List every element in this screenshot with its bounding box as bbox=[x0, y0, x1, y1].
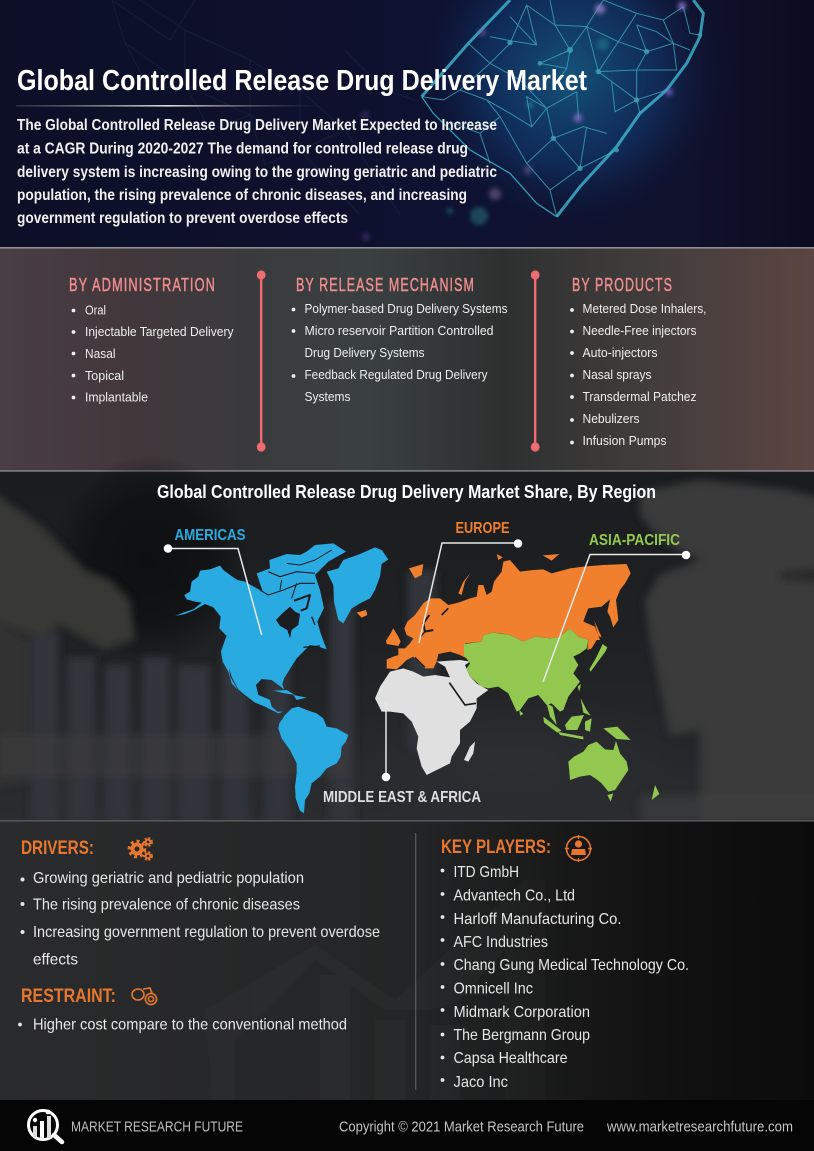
map region: Europe and Russia bbox=[357, 554, 631, 669]
icon: gears bbox=[129, 838, 152, 860]
chart heading: Global Controlled Release Drug Delivery Market Share, By Region bbox=[157, 482, 656, 502]
intro paragraph: The Global Controlled Release Drug Delivery Market Expected to Increase bbox=[17, 117, 497, 134]
column: by products: Transdermal Patchez bbox=[582, 389, 696, 404]
intro paragraph: government regulation to prevent overdose effects bbox=[17, 210, 348, 227]
background illustration: bright capsule mesh bbox=[422, 0, 703, 217]
column: by products bbox=[570, 274, 706, 448]
panel: header bbox=[0, 0, 814, 247]
column: by administration bbox=[69, 274, 234, 404]
decorative backdrop: soft tonal areas bbox=[50, 455, 250, 665]
section: key players: Capsa Healthcare bbox=[454, 1050, 568, 1067]
section: key players: Jaco Inc bbox=[454, 1074, 508, 1091]
title: Global Controlled Release Drug Delivery Market bbox=[17, 65, 587, 97]
intro paragraph: population, the rising prevalence of chronic diseases, and increasing bbox=[17, 187, 467, 204]
callout: Americas: AMERICAS bbox=[174, 527, 246, 544]
world map bbox=[175, 543, 659, 813]
map region: Canadian Arctic bbox=[257, 543, 346, 647]
column: by administration: BY ADMINISTRATION bbox=[69, 274, 216, 295]
background illustration: faint capsule mesh bbox=[112, 0, 415, 215]
decorative blurred backdrop: hands and bars bbox=[0, 480, 814, 822]
column: by products: Nebulizers bbox=[582, 411, 640, 426]
column: by products: BY PRODUCTS bbox=[572, 274, 673, 295]
column: by release mechanism: Systems bbox=[304, 389, 351, 404]
section: key players: AFC Industries bbox=[454, 934, 548, 951]
section: drivers: Growing geriatric and pediatric population bbox=[33, 870, 304, 887]
section: drivers: effects bbox=[33, 952, 78, 968]
column: by products: Needle-Free injectors bbox=[582, 323, 697, 338]
section: key players bbox=[441, 835, 689, 1091]
map region: Middle East and Africa bbox=[375, 660, 488, 775]
section: key players: ITD GmbH bbox=[454, 864, 519, 881]
callout: Europe bbox=[419, 520, 522, 643]
column: by administration: Implantable bbox=[85, 390, 148, 404]
icon: people in target bbox=[565, 835, 592, 862]
callout: Asia-Pacific: ASIA-PACIFIC bbox=[589, 532, 680, 549]
callout: Americas bbox=[164, 527, 262, 635]
column: by administration: Nasal bbox=[85, 346, 116, 361]
website: www.marketresearchfuture.com bbox=[606, 1120, 793, 1136]
map region: Asia-Pacific bbox=[464, 628, 659, 802]
panel: footer bbox=[0, 1100, 814, 1151]
section: key players: Advantech Co., Ltd bbox=[454, 888, 575, 904]
intro paragraph bbox=[17, 117, 497, 227]
callout: Middle East and Africa: MIDDLE EAST & AFRICA bbox=[323, 789, 481, 806]
section: key players: Omnicell Inc bbox=[454, 980, 533, 998]
decorative watermark arrow bbox=[205, 880, 545, 1100]
section: key players: Midmark Corporation bbox=[454, 1004, 590, 1021]
section: restraint: RESTRAINT: bbox=[21, 986, 116, 1007]
decorative glow dots bbox=[361, 2, 686, 240]
column: by products: Nasal sprays bbox=[582, 367, 652, 382]
column: by products: Metered Dose Inhalers, bbox=[582, 301, 706, 316]
section: key players: Chang Gung Medical Technology Co. bbox=[454, 957, 689, 974]
column: by release mechanism: Micro reservoir Partition Controlled bbox=[304, 323, 494, 338]
intro paragraph: delivery system is increasing owing to the growing geriatric and pediatric bbox=[17, 164, 497, 181]
section: key players: KEY PLAYERS: bbox=[441, 837, 551, 858]
section: drivers: Increasing government regulation to prevent overdose bbox=[33, 924, 380, 941]
section: key players: Harloff Manufacturing Co. bbox=[454, 911, 622, 928]
panel: drivers, restraint and key players bbox=[0, 820, 814, 1101]
intro paragraph: at a CAGR During 2020-2027 The demand for controlled release drug bbox=[17, 140, 468, 158]
column: by release mechanism: BY RELEASE MECHANISM bbox=[296, 274, 475, 295]
column: by products: Infusion Pumps bbox=[582, 433, 667, 448]
column: by products: Auto-injectors bbox=[582, 345, 658, 360]
column: by release mechanism: Polymer-based Drug Delivery Systems bbox=[304, 301, 508, 316]
section: drivers: The rising prevalence of chronic diseases bbox=[33, 896, 300, 914]
panel: regional market share bbox=[0, 455, 814, 830]
column: by release mechanism: Drug Delivery Systems bbox=[304, 345, 425, 360]
callout: Europe: EUROPE bbox=[456, 520, 510, 537]
column: by administration: Topical bbox=[85, 368, 124, 383]
copyright: Copyright © 2021 Market Research Future bbox=[339, 1120, 584, 1136]
column: by administration: Oral bbox=[85, 302, 106, 318]
icon: handcuffs bbox=[132, 988, 157, 1005]
section: key players: The Bergmann Group bbox=[454, 1027, 590, 1044]
column: by release mechanism bbox=[292, 274, 508, 404]
section: drivers: DRIVERS: bbox=[21, 838, 94, 859]
map region: Americas bbox=[175, 543, 388, 813]
icon: Market Research Future logo bbox=[28, 1110, 62, 1142]
footer brand: MARKET RESEARCH FUTURE bbox=[71, 1120, 243, 1136]
section: restraint bbox=[18, 986, 347, 1034]
callout: Middle East and Africa bbox=[323, 702, 481, 806]
panel: market segmentation bbox=[0, 247, 814, 472]
column: by administration: Injectable Targeted Delivery bbox=[85, 324, 234, 339]
section: restraint: Higher cost compare to the conventional method bbox=[33, 1016, 347, 1034]
column: by release mechanism: Feedback Regulated Drug Delivery bbox=[304, 367, 488, 382]
callout: Asia-Pacific bbox=[543, 532, 690, 682]
divider: pink pin line 2 bbox=[531, 270, 540, 452]
section: drivers bbox=[20, 838, 380, 968]
divider: pink pin line 1 bbox=[257, 270, 266, 452]
